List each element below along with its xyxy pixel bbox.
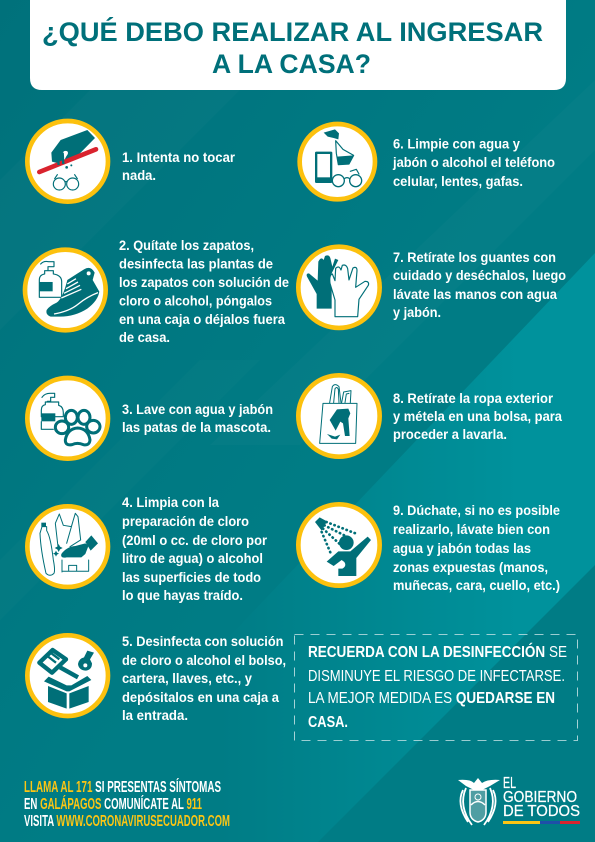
- step 5 text: la entrada.: [122, 708, 188, 724]
- logo: El Gobierno de Todos: EL: [503, 775, 516, 792]
- step 8 text: 8. Retírate la ropa exterior: [393, 391, 553, 407]
- step 4 text: 4. Limpia con la: [122, 495, 219, 511]
- step 9 text: realizarlo, lávate bien con: [393, 522, 550, 538]
- step 7 text: [393, 250, 566, 321]
- icon 9: shower: [298, 504, 380, 586]
- step 2 text: los zapatos con solución de: [119, 275, 289, 291]
- icon 3: sanitizer and paw: [27, 378, 108, 459]
- title panel: [30, 0, 566, 90]
- step 9 text: agua y jabón todas las: [393, 541, 531, 557]
- step 7 text: y jabón.: [393, 305, 441, 321]
- step 2 text: de casa.: [119, 330, 170, 346]
- step 8 text: [393, 391, 562, 443]
- step 5 text: de cloro o alcohol el bolso,: [122, 653, 286, 669]
- icon 1: hand, brush and glasses: [27, 121, 108, 202]
- footer contact text: EN GALÁPAGOS COMUNÍCATE AL 911: [24, 794, 202, 813]
- step 4 text: lo que hayas traído.: [122, 588, 243, 604]
- icon 5: box with belongings: [27, 635, 108, 716]
- step 9 text: zonas expuestas (manos,: [393, 560, 548, 576]
- step 6 text: [392, 136, 555, 190]
- step 4 text: [122, 495, 267, 604]
- step 2 text: en una caja o déjalos fuera: [119, 312, 285, 328]
- step 4 text: litro de agua) o alcohol: [122, 551, 263, 567]
- icon 4: bottle, bag and cleaning hand: [27, 506, 108, 587]
- callout: reminder: CASA.: [308, 714, 348, 731]
- logo: El Gobierno de Todos: [458, 775, 580, 825]
- step 5 text: depósitalos en una caja a: [122, 690, 279, 706]
- step 9 text: muñecas, cara, cuello, etc.): [393, 578, 560, 594]
- step 2 text: 2. Quítate los zapatos,: [119, 238, 254, 254]
- logo: El Gobierno de Todos: DE TODOS: [503, 803, 580, 820]
- footer contact text: VISITA WWW.CORONAVIRUSECUADOR.COM: [24, 813, 230, 830]
- title: A LA CASA?: [212, 49, 371, 79]
- icon 8: bag with clothes: [298, 375, 380, 457]
- step 7 text: 7. Retírate los guantes con: [393, 250, 556, 266]
- step 5 text: 5. Desinfecta con solución: [122, 634, 284, 650]
- step 5 text: [122, 634, 286, 724]
- step 9 text: [393, 503, 560, 594]
- step 9 text: 9. Dúchate, si no es posible: [393, 503, 560, 519]
- step 6 text: celular, lentes, gafas.: [393, 174, 523, 190]
- icon 6: phone, spray and glasses: [300, 124, 375, 199]
- step 8 text: y métela en una bolsa, para: [393, 409, 562, 425]
- step 3 text: las patas de la mascota.: [122, 420, 271, 436]
- step 6 text: 6. Limpie con agua y: [393, 136, 520, 152]
- logo: El Gobierno de Todos: GOBIERNO: [503, 789, 577, 806]
- step 3 text: [122, 402, 273, 436]
- step 1 text: 1. Intenta no tocar: [122, 150, 235, 166]
- callout: reminder: LA MEJOR MEDIDA ES QUEDARSE EN: [308, 690, 555, 707]
- icon 2: sanitizer and shoe: [25, 250, 106, 330]
- step 4 text: las superficies de todo: [122, 570, 261, 586]
- step 5 text: cartera, llaves, etc., y: [122, 671, 252, 687]
- footer contact text: [24, 777, 230, 830]
- footer contact text: LLAMA AL 171 SI PRESENTAS SÍNTOMAS: [24, 777, 221, 796]
- title: ¿QUÉ DEBO REALIZAR AL INGRESAR: [42, 16, 543, 47]
- step 4 text: (20ml o cc. de cloro por: [122, 533, 267, 549]
- step 3 text: 3. Lave con agua y jabón: [122, 402, 273, 418]
- step 1 text: nada.: [122, 168, 156, 184]
- step 2 text: cloro o alcohol, póngalos: [119, 294, 272, 310]
- step 8 text: proceder a lavarla.: [393, 427, 507, 443]
- icon 7: gloves: [298, 247, 380, 328]
- step 4 text: preparación de cloro: [122, 514, 249, 530]
- title: [42, 16, 543, 79]
- step 2 text: desinfecta las plantas de: [119, 256, 273, 272]
- callout: reminder: RECUERDA CON LA DESINFECCIÓN SE: [308, 643, 567, 661]
- callout: reminder: [294, 634, 578, 740]
- step 7 text: cuidado y deséchalos, luego: [393, 268, 566, 284]
- step 7 text: lávate las manos con agua: [393, 287, 557, 303]
- step 6 text: jabón o alcohol el teléfono: [392, 155, 555, 171]
- step 1 text: [122, 150, 235, 184]
- step 2 text: [119, 238, 289, 346]
- icon: coat of arms: [458, 778, 500, 825]
